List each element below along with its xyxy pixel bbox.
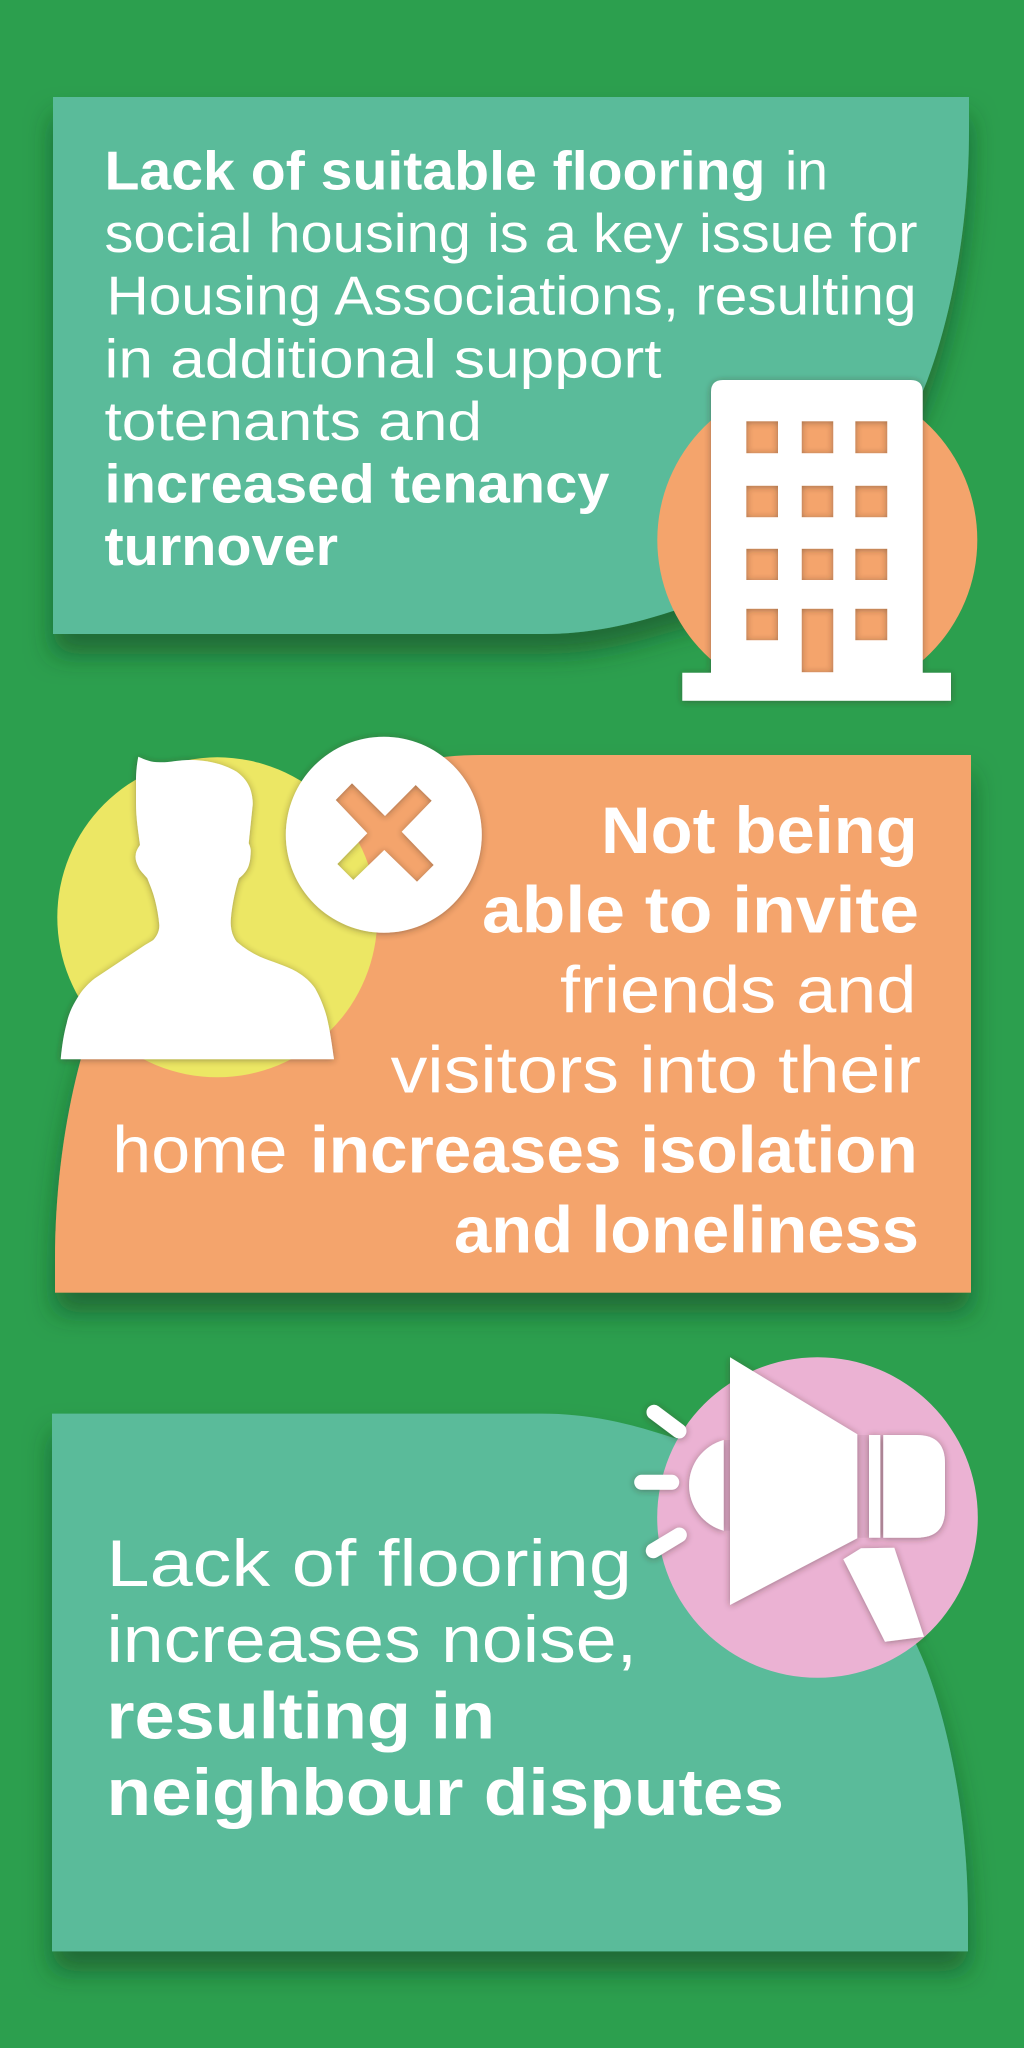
icon: megaphone: [642, 1357, 945, 1642]
text block: not being able to invite: and loneliness: [454, 1193, 919, 1267]
text block: flooring issue: in additional support: [104, 327, 662, 389]
icon: pink circle: [657, 1357, 978, 1678]
text block: not being able to invite: friends and: [560, 953, 916, 1027]
megaphone cone: [730, 1357, 857, 1605]
text block: flooring issue: Housing Associations, resulting: [106, 264, 916, 326]
icon: megaphone gaps: [724, 1435, 883, 1538]
icon: orange circle: [657, 380, 977, 700]
panel shape: teal card: [53, 97, 969, 634]
icon: person silhouette: [61, 757, 334, 1059]
panel: tenancy turnover: [53, 97, 977, 701]
text block: noise: [106, 1526, 784, 1829]
megaphone rear cap: [883, 1435, 945, 1538]
sound rays: [642, 1412, 679, 1551]
text block: flooring issue: totenants and: [104, 390, 482, 452]
text block: not being able to invite: able to invite: [482, 873, 919, 947]
text block: noise: increases noise,: [106, 1602, 637, 1676]
panel shape: teal card: [52, 1414, 968, 1951]
megaphone front dome: [689, 1440, 724, 1531]
panel: isolation and loneliness: [55, 737, 971, 1293]
megaphone band: [869, 1435, 880, 1538]
text block: flooring issue: Lack of suitable flooring: [104, 140, 765, 202]
text block: noise: resulting in: [106, 1679, 495, 1753]
text block: noise: Lack of flooring: [106, 1526, 632, 1600]
text block: flooring issue: increased tenancy: [104, 453, 610, 515]
megaphone handle: [843, 1548, 924, 1642]
text block: not being able to invite: [112, 793, 921, 1267]
icon: yellow circle: [57, 757, 377, 1077]
icon: apartment building: [682, 380, 951, 701]
text block: not being able to invite: Not being: [601, 793, 918, 867]
text block: flooring issue: turnover: [104, 515, 338, 577]
text block: not being able to invite: home: [112, 1113, 287, 1187]
icon: white circle with cross: [286, 737, 482, 933]
text block: flooring issue: [104, 140, 918, 577]
text block: flooring issue: social housing is a key issue for: [104, 202, 918, 264]
panel: noise and disputes: [52, 1357, 978, 1951]
text block: noise: neighbour disputes: [106, 1755, 784, 1829]
text block: not being able to invite: increases isolation: [310, 1113, 918, 1187]
panel shape: orange card: [55, 755, 971, 1293]
text block: flooring issue: in: [785, 140, 828, 202]
text block: not being able to invite: visitors into their: [391, 1033, 921, 1107]
